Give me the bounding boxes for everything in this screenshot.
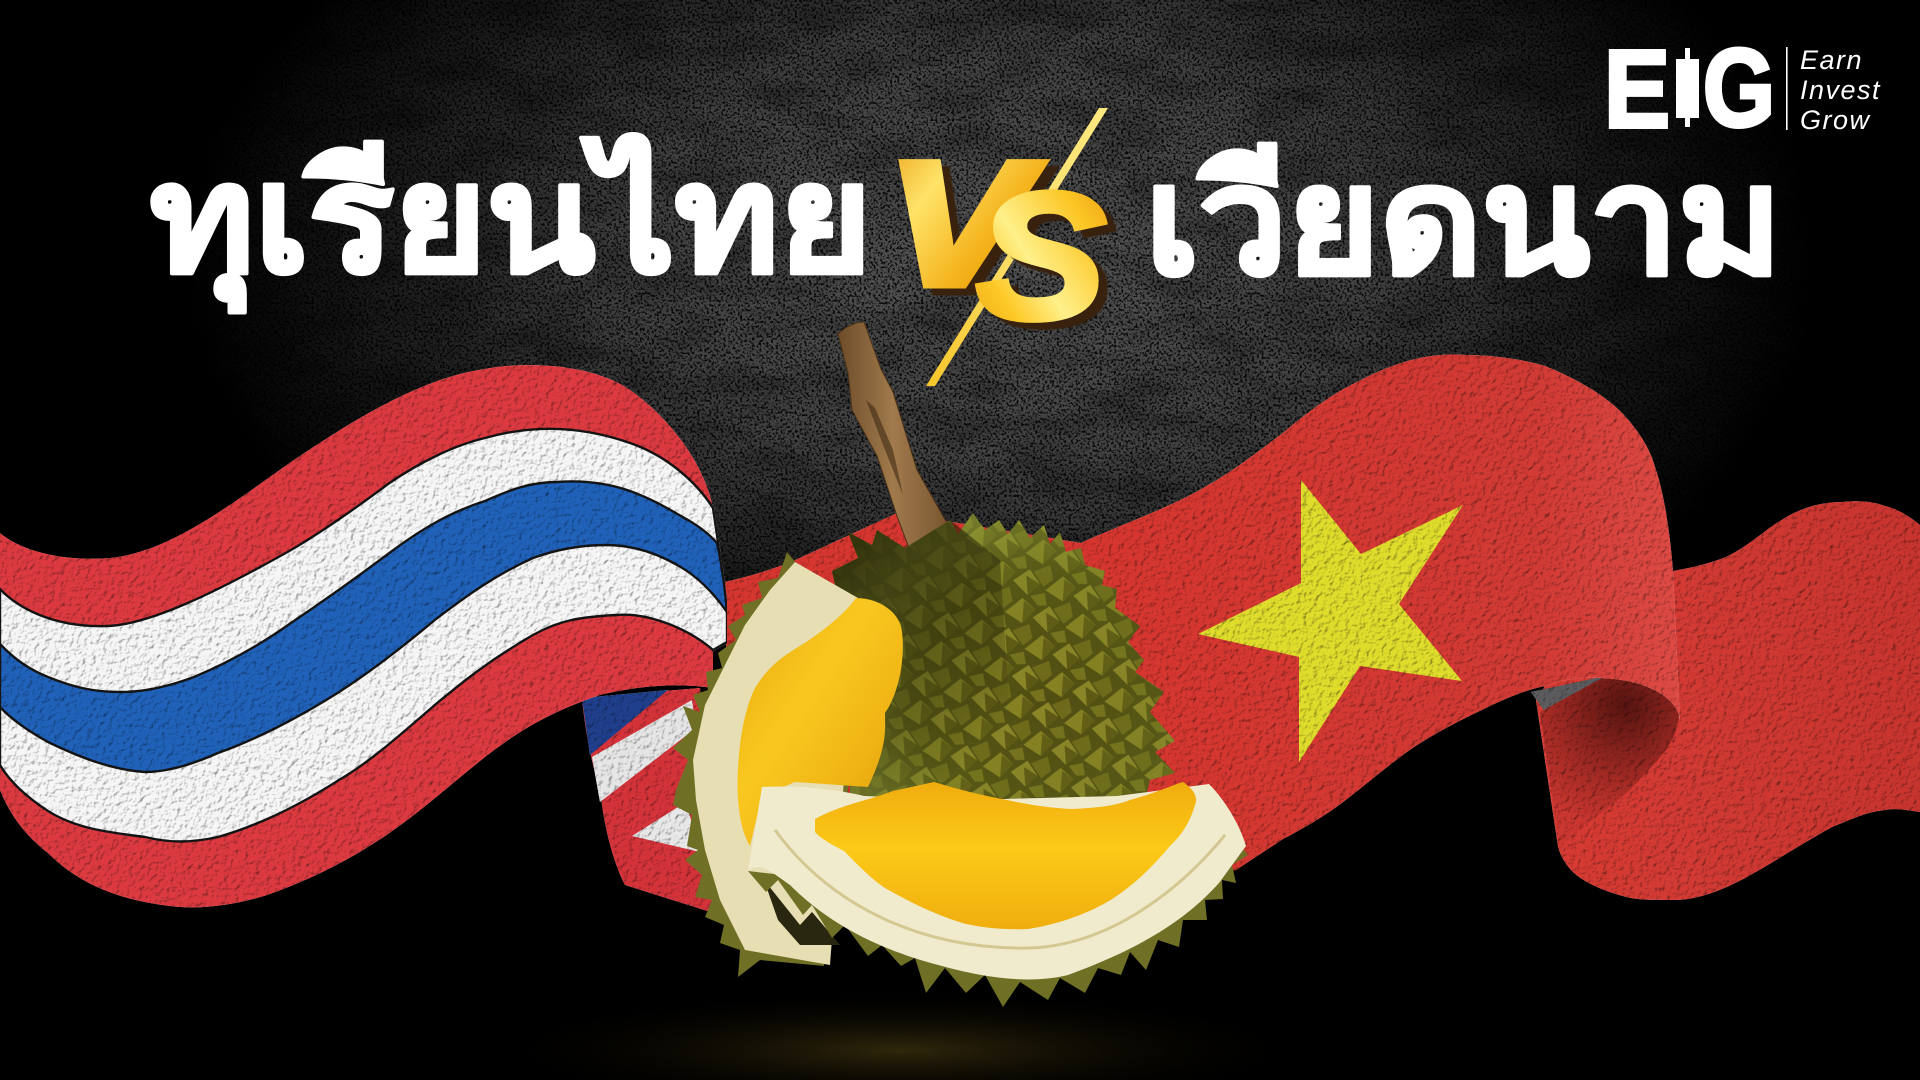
durian: lower rind <box>748 784 1246 979</box>
durian: lower flesh pod <box>815 782 1196 929</box>
durian: whole fruit with stem <box>673 322 1248 1007</box>
title: Vietnam: เวียดนาม <box>1145 137 1782 305</box>
title: Thai durian: ทุเรียนไทย <box>150 134 872 313</box>
logo: EIG Earn Invest Grow: Invest <box>1800 75 1881 105</box>
durian: lower rind spikes <box>748 845 1248 1007</box>
logo: EIG Earn Invest Grow <box>1604 27 1881 151</box>
durian: upper flesh pod <box>738 598 903 846</box>
blue band <box>0 481 727 772</box>
red band <box>0 365 727 907</box>
durian stem <box>838 322 948 548</box>
Vietnam flag: right tail <box>1531 501 1920 900</box>
logo: EIG Earn Invest Grow: E <box>1604 28 1670 151</box>
durian: dark gap between rinds <box>764 880 840 945</box>
Vietnam flag: main panel <box>720 354 1680 900</box>
durian: left rind flesh <box>693 562 858 965</box>
Thai flag: front waving stripes <box>0 365 727 907</box>
durian spiky ball <box>832 513 1175 830</box>
star <box>1198 480 1463 762</box>
logo: EIG Earn Invest Grow: G <box>1703 27 1775 150</box>
VS gold badge: S <box>976 156 1106 357</box>
logo: EIG Earn Invest Grow: Grow <box>1800 105 1871 135</box>
logo: EIG Earn Invest Grow: Earn <box>1800 45 1863 75</box>
white band <box>0 429 727 842</box>
Thai flag ribbon: back fold <box>582 688 717 914</box>
durian: left rind spikes <box>673 552 860 977</box>
VS gold badge <box>887 108 1108 386</box>
VS gold badge: V <box>887 127 1042 322</box>
